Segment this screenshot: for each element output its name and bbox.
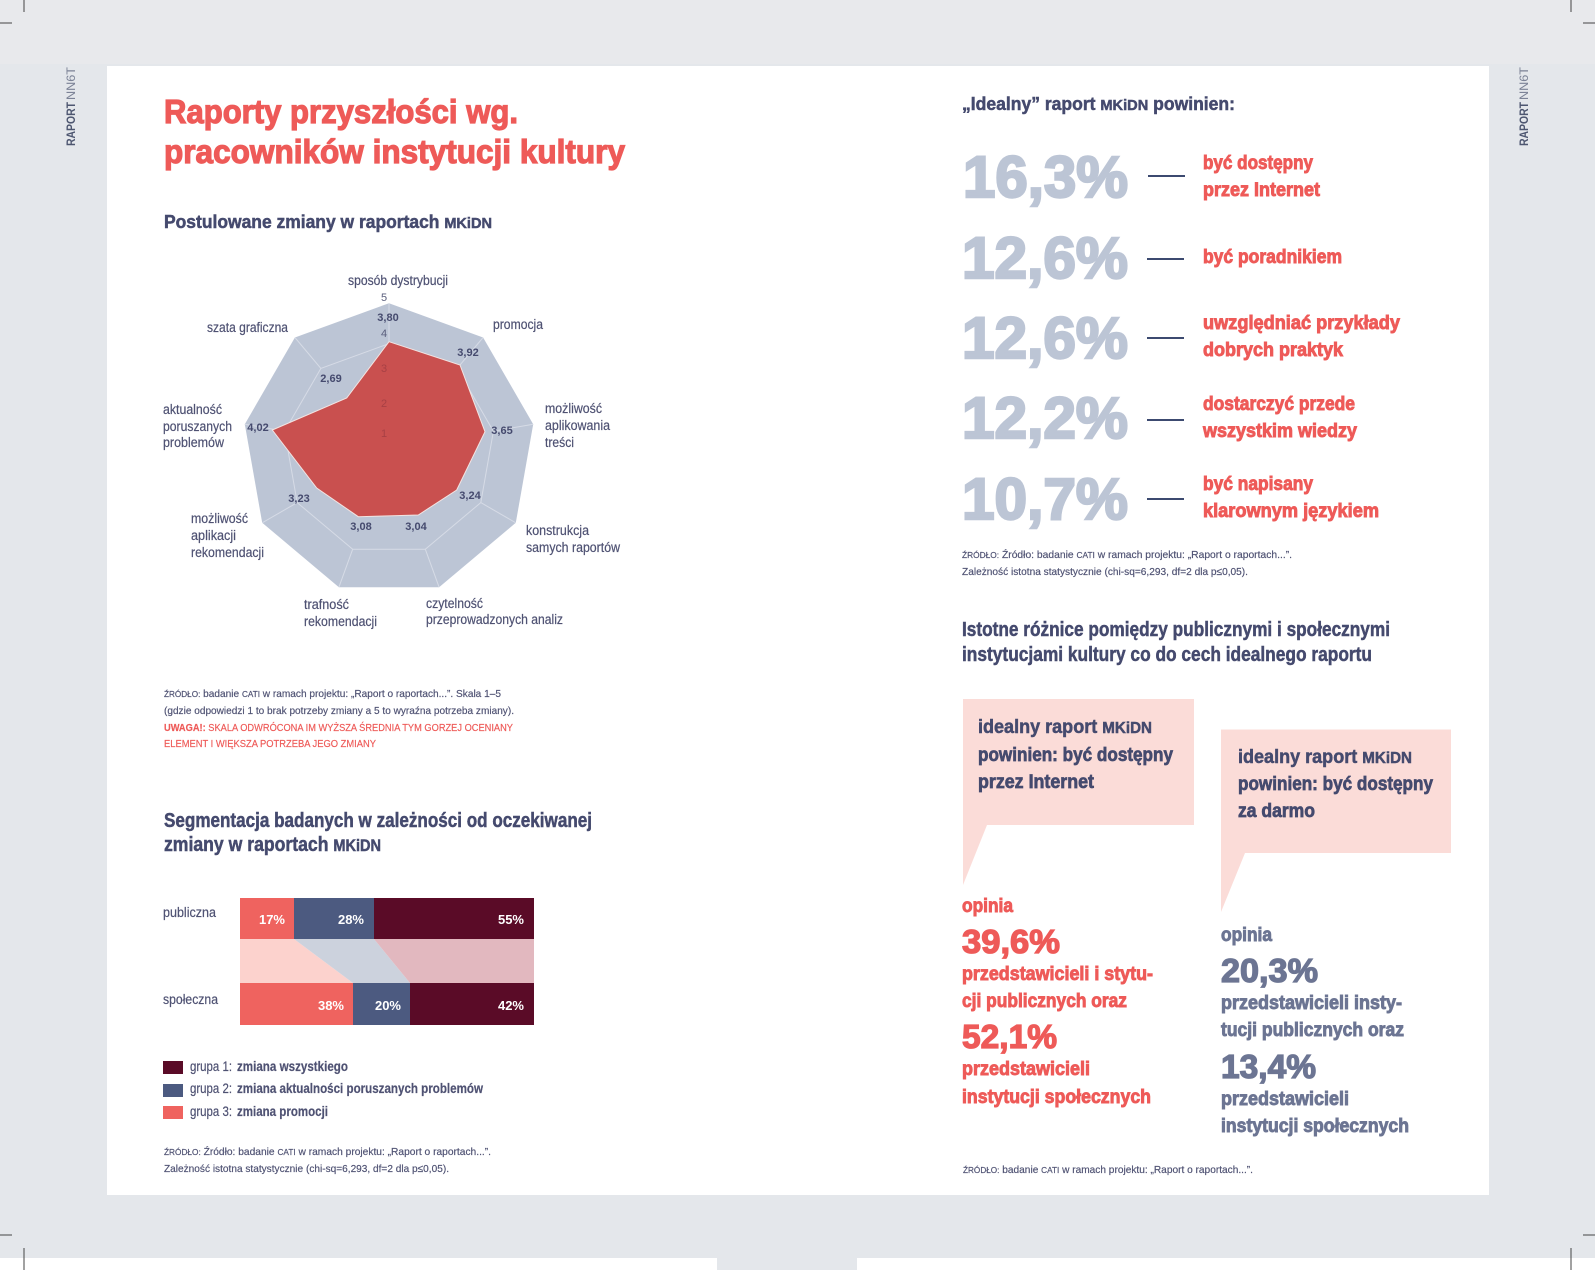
stat: 12,6% dobre praktyki: uwzględniać przykłady — [1203, 312, 1400, 334]
opinion column: za darmo — [1221, 924, 1409, 1137]
radar values: 3,65 — [491, 425, 513, 437]
left side tab: RAPORT NN6T: RAPORT — [64, 101, 78, 146]
stat: 12,6% poradnik: być poradnikiem — [1203, 246, 1342, 268]
stat: 12,6% poradnik — [962, 226, 1342, 291]
radar background nonagon — [245, 303, 533, 587]
stat: 12,6% dobre praktyki: 12,6% — [962, 306, 1128, 371]
stacked bar chart — [163, 898, 534, 1025]
opinion column: za darmo: przedstawicieli — [1221, 1088, 1349, 1110]
radar data polygon — [272, 342, 485, 517]
speech bubble: przez Internet: idealny raport MKiDN — [978, 717, 1152, 738]
right side tab: RAPORT NN6T: NN6T — [1517, 66, 1531, 100]
radar axis labels: problemów — [163, 435, 224, 450]
opinion column: Internet: cji publicznych oraz — [962, 990, 1127, 1012]
radar values: 3,23 — [288, 493, 310, 505]
radar axis labels: możliwość — [191, 511, 248, 526]
radar axis labels: rekomendacji — [304, 614, 377, 629]
radar axis labels: czytelność — [426, 596, 483, 611]
source note: ideal report: ŹRÓDŁO: Źródło: badanie CATI w ramach projektu: „Raport o raportach...”. — [962, 548, 1292, 561]
legend: grupa 1: — [190, 1059, 232, 1074]
radar values: 3,08 — [350, 521, 372, 533]
radar axis labels: aplikacji — [191, 528, 236, 543]
source note: differences: ŹRÓDŁO: badanie CATI w ramach projektu: „Raport o raportach...”. — [963, 1164, 1253, 1176]
radar scale numbers: 1 — [381, 428, 387, 440]
bar: społeczna: 20% — [375, 998, 401, 1013]
opinion column: Internet: instytucji społecznych — [962, 1086, 1151, 1108]
legend: grupa 2: — [190, 1081, 232, 1096]
row labels: społeczna — [163, 992, 218, 1007]
heading: differences: Istotne różnice pomiędzy publicznymi i społecznymi — [962, 619, 1390, 641]
bar: publiczna — [240, 898, 534, 939]
source note: ideal report — [962, 548, 1292, 578]
heading: segmentation: Segmentacja badanych w zależności od oczekiwanej — [164, 810, 592, 832]
stat: 12,2% — [962, 386, 1357, 451]
source note: radar: UWAGA!: SKALA ODWRÓCONA IM WYŻSZA ŚREDNIA TYM GORZEJ OCENIANY — [164, 721, 513, 734]
opinion column: Internet: przedstawicieli — [962, 1058, 1090, 1080]
bar: społeczna: 38% — [318, 998, 344, 1013]
stat: 10,7%: być napisany — [1203, 473, 1313, 495]
title: Raporty przyszłości wg. — [164, 93, 518, 130]
radar chart — [163, 273, 620, 629]
source note: radar: ŹRÓDŁO: badanie CATI w ramach projektu: „Raport o raportach...”. Skala 1–5 — [164, 688, 501, 700]
opinion column: Internet: przedstawicieli i stytu- — [962, 963, 1153, 985]
radar axis labels: aktualność — [163, 402, 222, 417]
speech bubble: za darmo: idealny raport MKiDN — [1238, 747, 1412, 768]
title: pracowników instytucji kultury — [164, 133, 626, 170]
heading: differences: instytucjami kultury co do cech idealnego raportu — [962, 644, 1372, 666]
radar axis labels: samych raportów — [526, 540, 620, 555]
speech bubble: przez Internet: przez Internet — [978, 772, 1095, 793]
radar values: 3,24 — [459, 490, 482, 502]
legend: zmiana promocji — [237, 1104, 328, 1119]
stat: 12,2%: wszystkim wiedzy — [1202, 420, 1357, 442]
stat: 12,6% dobre praktyki — [962, 306, 1400, 371]
speech bubble: przez Internet — [963, 699, 1194, 885]
bar: społeczna — [240, 983, 534, 1025]
stat: 10,7% — [962, 467, 1379, 532]
source note: radar — [164, 688, 514, 750]
source note: radar: ELEMENT I WIĘKSZA POTRZEBA JEGO ZMIANY — [164, 738, 376, 750]
opinion column: za darmo: 20,3% — [1221, 952, 1318, 989]
radar axis labels: możliwość — [545, 401, 602, 416]
row labels — [163, 905, 218, 1007]
radar axis labels: treści — [545, 435, 574, 450]
radar scale numbers — [381, 292, 387, 440]
opinion column: Internet: 39,6% — [962, 923, 1060, 960]
radar scale numbers: 4 — [381, 328, 387, 340]
radar axis labels: przeprowadzonych analiz — [426, 612, 563, 627]
radar axis labels: konstrukcja — [526, 523, 589, 538]
source note: radar: (gdzie odpowiedzi 1 to brak potrzeby zmiany a 5 to wyraźna potrzeba zmiany). — [164, 705, 514, 717]
source note: segmentation: ŹRÓDŁO: Źródło: badanie CATI w ramach projektu: „Raport o raportach...”. — [164, 1145, 491, 1158]
opinion column: Internet: opinia — [962, 895, 1013, 917]
source note: segmentation: Zależność istotna statystycznie (chi-sq=6,293, df=2 dla p≤0,05). — [164, 1163, 449, 1175]
bar: publiczna: 28% — [338, 912, 364, 927]
connector bands — [240, 939, 534, 983]
radar axis labels: promocja — [493, 317, 543, 332]
stat: 12,6% poradnik: 12,6% — [962, 226, 1128, 291]
stat: 12,2%: dostarczyć przede — [1203, 393, 1355, 415]
stat: 16,3%: 16,3% — [963, 145, 1128, 210]
speech bubble: przez Internet: powinien: być dostępny — [978, 745, 1173, 766]
stat: 16,3%: przez Internet — [1203, 179, 1320, 201]
bar: publiczna: 55% — [498, 912, 524, 927]
radar values: 3,80 — [377, 312, 399, 324]
radar axis labels: sposób dystrybucji — [348, 273, 448, 288]
stat: 10,7%: klarownym językiem — [1203, 500, 1379, 522]
opinion column: za darmo: 13,4% — [1221, 1048, 1316, 1085]
opinion column: Internet: 52,1% — [962, 1018, 1057, 1055]
radar scale numbers: 5 — [381, 292, 387, 304]
legend: grupa 3: — [190, 1104, 232, 1119]
legend: zmiana wszystkiego — [237, 1059, 348, 1074]
bar: społeczna: 42% — [498, 998, 524, 1013]
stat: 16,3% — [963, 145, 1320, 210]
radar values — [247, 312, 513, 533]
heading: segmentation: zmiany w raportach MKiDN — [164, 834, 381, 856]
opinion column: za darmo: instytucji społecznych — [1221, 1115, 1409, 1137]
radar values: 2,69 — [320, 373, 342, 385]
stat: 10,7%: 10,7% — [962, 467, 1128, 532]
stat: 16,3%: być dostępny — [1203, 152, 1313, 174]
row labels: publiczna — [163, 905, 216, 920]
radar axis labels: poruszanych — [163, 419, 232, 434]
legend — [163, 1059, 483, 1119]
speech bubble: za darmo: powinien: być dostępny — [1238, 774, 1433, 795]
speech bubble: za darmo — [1221, 730, 1451, 912]
opinion column: za darmo: opinia — [1221, 924, 1272, 946]
heading: ideal report: „Idealny” raport MKiDN powinien: — [962, 94, 1235, 114]
heading: differences — [962, 619, 1390, 666]
radar axis labels: aplikowania — [545, 418, 610, 433]
stat: 12,2%: 12,2% — [962, 386, 1128, 451]
opinion column: za darmo: tucji publicznych oraz — [1221, 1019, 1404, 1041]
radar axis labels: rekomendacji — [191, 545, 264, 560]
right side tab: RAPORT NN6T: RAPORT — [1517, 101, 1531, 146]
opinion column: Internet — [962, 895, 1153, 1108]
white page panel — [107, 66, 1489, 1195]
source note: ideal report: Zależność istotna statystycznie (chi-sq=6,293, df=2 dla p≤0,05). — [962, 566, 1248, 578]
radar scale numbers: 3 — [381, 363, 387, 375]
left side tab: RAPORT NN6T: NN6T — [64, 66, 78, 100]
right side tab: RAPORT NN6T — [1517, 66, 1531, 146]
source note: segmentation — [164, 1145, 491, 1175]
left side tab: RAPORT NN6T — [64, 66, 78, 146]
speech bubble: za darmo: za darmo — [1238, 801, 1315, 822]
radar values: 4,02 — [247, 422, 269, 434]
radar values: 3,04 — [405, 521, 428, 533]
legend: zmiana aktualności poruszanych problemów — [237, 1081, 483, 1096]
stat: 12,6% dobre praktyki: dobrych praktyk — [1203, 339, 1343, 361]
radar scale numbers: 2 — [381, 398, 387, 410]
heading: segmentation — [164, 810, 592, 856]
bar: publiczna: 17% — [259, 912, 285, 927]
radar axis labels: szata graficzna — [207, 320, 288, 335]
radar axis labels — [163, 273, 620, 629]
opinion column: za darmo: przedstawicieli insty- — [1221, 992, 1402, 1014]
radar values: 3,92 — [457, 347, 479, 359]
radar axis labels: trafność — [304, 597, 349, 612]
heading: postulated changes: Postulowane zmiany w raportach MKiDN — [164, 212, 492, 232]
title — [164, 93, 626, 170]
